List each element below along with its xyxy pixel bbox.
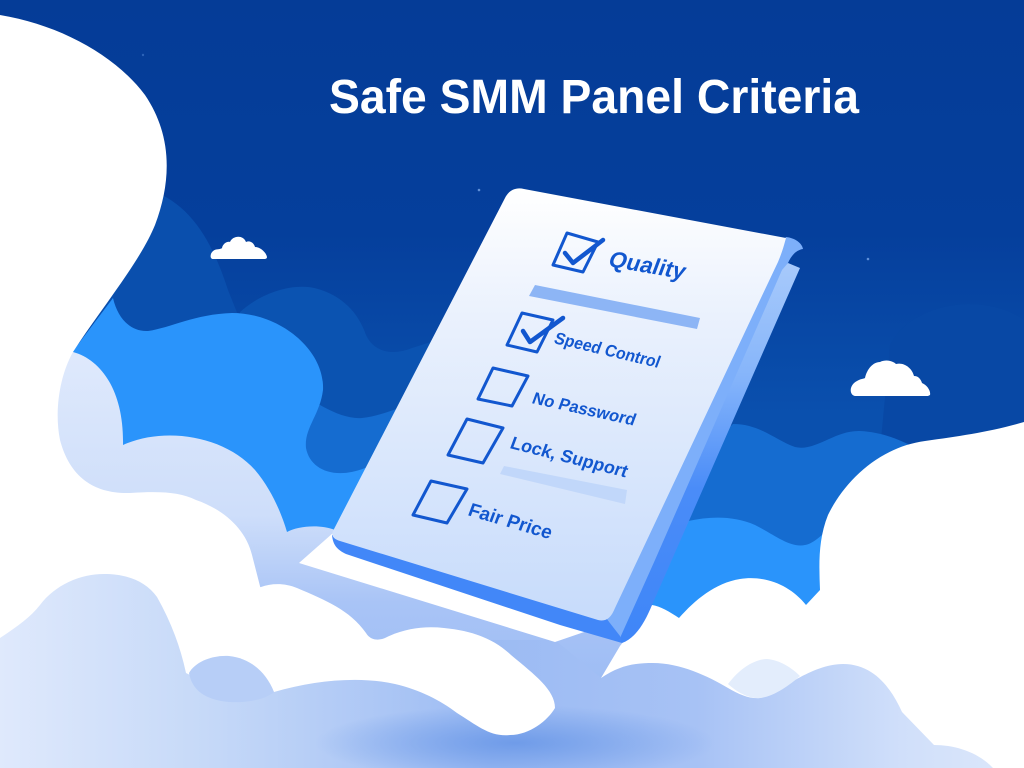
- label: Speed Control: Speed Control: [552, 329, 663, 372]
- icon: small cloud right: [851, 361, 930, 396]
- loose white sheet under the document: [299, 533, 590, 642]
- checklist document: [299, 188, 803, 643]
- background: deep blue cloud layers: [90, 190, 1024, 620]
- small star: [142, 54, 144, 56]
- small star: [478, 189, 480, 191]
- label: No Password: No Password: [530, 389, 639, 429]
- small star: [867, 258, 869, 260]
- label: Quality: Quality: [605, 246, 690, 284]
- icon: checked box Quality: [553, 233, 603, 272]
- left pale cloud layer: [0, 352, 640, 700]
- small blue cloud bump: [189, 656, 274, 702]
- icon: empty box Lock, Support: [448, 419, 503, 463]
- document back page: [615, 263, 800, 643]
- large white cloud at top left: [0, 15, 261, 700]
- pale cloud bump: [728, 659, 800, 698]
- icon: empty box No Password: [478, 368, 528, 406]
- white foreground cloud: [186, 584, 555, 735]
- icon: checked box Speed Control: [507, 313, 563, 352]
- label: Lock, Support: Lock, Support: [508, 433, 631, 481]
- document front face: [332, 188, 786, 620]
- divider bar: [529, 285, 700, 329]
- soft shadow on the ground: [315, 705, 715, 768]
- background: bright blue cloud layers: [55, 298, 825, 625]
- icon: small cloud left: [211, 237, 267, 259]
- label: Fair Price: Fair Price: [465, 500, 555, 544]
- document bottom edge: [332, 535, 622, 643]
- bottom blue cloud bank: [0, 574, 993, 768]
- title: Safe SMM Panel Criteria: [329, 71, 859, 124]
- large white cloud at right: [601, 422, 1024, 768]
- icon: empty box Fair Price: [413, 481, 467, 523]
- faint divider bar: [500, 466, 627, 504]
- document side edge: [606, 237, 803, 638]
